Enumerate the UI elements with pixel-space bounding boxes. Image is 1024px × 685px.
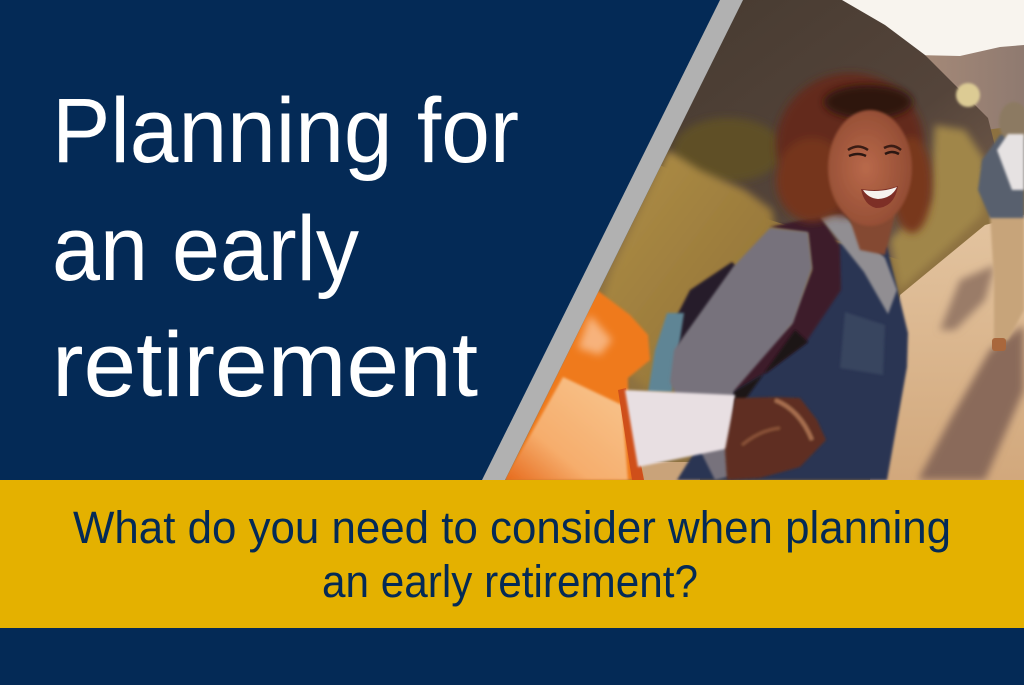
lens flare [956, 83, 980, 107]
smile [861, 186, 898, 208]
trail lower-left dirt [640, 462, 700, 480]
photo: hikers on a trail [500, 0, 1024, 480]
sky [840, 0, 1024, 60]
boot [992, 338, 1006, 351]
dark olive scrub on the slope [673, 118, 783, 182]
brows and eyes [848, 146, 901, 150]
grey diagonal divider [482, 0, 743, 480]
subheading [73, 502, 951, 607]
backpack strap [733, 216, 841, 392]
sweater hood [820, 213, 897, 314]
teeth [863, 187, 897, 199]
shadows on the trail [918, 325, 1024, 480]
clasped hands [725, 397, 826, 480]
water bottle [648, 313, 684, 392]
orange jacket lower panel [505, 377, 628, 480]
distant mountains [915, 45, 1024, 130]
vest [677, 243, 908, 480]
white pack [997, 134, 1024, 190]
dark strap shadow [733, 330, 808, 403]
face [828, 110, 912, 226]
golden bush [604, 148, 778, 386]
right hand bushes [890, 125, 985, 290]
white sleeve [625, 390, 735, 467]
sweater arm [670, 228, 812, 480]
title: retirement [52, 314, 478, 416]
yellow question band [0, 480, 1024, 628]
orange jacket highlight [578, 315, 612, 355]
orange jacket of the person in front [505, 290, 650, 480]
orange jacket edge [618, 388, 644, 480]
main dark mountain [650, 0, 996, 260]
navy footer band [0, 628, 1024, 685]
hair [776, 73, 932, 233]
jacket [978, 130, 1024, 218]
dirt trail [870, 215, 1024, 480]
neck [849, 216, 895, 256]
navy title panel [0, 0, 720, 480]
subheading: What do you need to consider when planning [73, 502, 951, 553]
hair dark crown [824, 85, 912, 119]
title [52, 80, 519, 416]
subheading: an early retirement? [322, 556, 698, 607]
pants [990, 215, 1024, 340]
backpack body [676, 260, 736, 346]
hiker in the background [978, 102, 1024, 351]
title: an early [52, 198, 359, 300]
title: Planning for [52, 80, 519, 182]
vest pocket [840, 312, 885, 375]
head [999, 102, 1024, 142]
photo base tone [500, 0, 1024, 480]
